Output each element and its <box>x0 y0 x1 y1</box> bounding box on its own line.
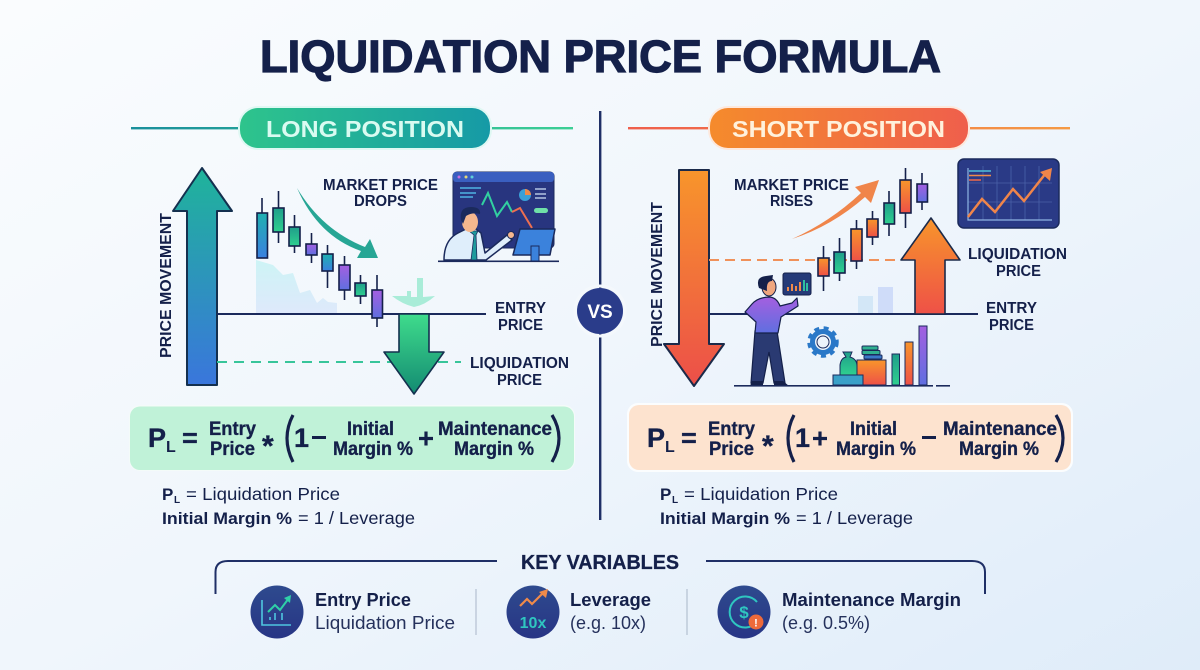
label: market price rises: RISES <box>770 193 813 210</box>
formula notes: short: L <box>672 495 678 506</box>
formula notes: long: = Liquidation Price <box>186 484 340 504</box>
label: market price rises <box>734 177 849 210</box>
label: entry price: PRICE <box>989 317 1034 334</box>
item: maintenance margin: Maintenance Margin <box>782 590 961 610</box>
formula: long: 1 <box>294 423 309 453</box>
label: entry price: ENTRY <box>495 300 547 317</box>
faded bars <box>858 287 893 314</box>
heading: long position pill: LONG POSITION <box>266 116 464 142</box>
arrow: price movement up <box>173 168 232 385</box>
label: entry price: ENTRY <box>986 300 1038 317</box>
item: leverage <box>506 586 651 638</box>
label: liquidation price: PRICE <box>996 263 1041 280</box>
item: entry price: Liquidation Price <box>315 613 455 633</box>
panel: short position <box>627 106 1073 528</box>
label: price movement: PRICE MOVEMENT <box>158 213 175 358</box>
label: price movement: PRICE MOVEMENT <box>649 202 666 347</box>
center divider with VS badge <box>575 111 625 520</box>
formula notes: long: = 1 / Leverage <box>298 508 415 528</box>
arrow: market price rise <box>792 180 879 239</box>
heading: short position pill: SHORT POSITION <box>732 116 945 142</box>
formula: short: Entry <box>708 419 755 440</box>
label: entry price <box>986 300 1038 334</box>
formula: long: P <box>148 423 166 453</box>
label: entry price: PRICE <box>498 317 543 334</box>
arrow: price movement down <box>664 170 724 386</box>
arrow: green down to liquidation <box>384 314 444 394</box>
formula: long: * <box>262 430 274 463</box>
liquidation dashed line <box>709 259 895 261</box>
formula notes: long: P <box>162 485 173 504</box>
formula: short: Maintenance <box>943 419 1057 440</box>
item: maintenance margin: ! <box>754 618 758 630</box>
bracket <box>216 561 985 594</box>
formula: long: L <box>166 439 176 456</box>
formula: short: Initial <box>850 419 897 440</box>
formula: long: Maintenance <box>438 419 552 440</box>
icon: gear <box>809 328 837 356</box>
faded down arrow icon <box>392 278 435 307</box>
formula: short: Margin % <box>959 439 1039 460</box>
title: LIQUIDATION PRICE FORMULA <box>260 31 941 82</box>
label: market price rises: MARKET PRICE <box>734 177 849 194</box>
formula notes: long: Initial Margin % <box>162 509 292 528</box>
panel: key variables <box>216 552 985 638</box>
formula: short: Price <box>709 439 754 460</box>
divider <box>686 589 688 635</box>
chart card: rising trend <box>958 159 1059 228</box>
item: leverage: 10x <box>520 615 546 632</box>
formula notes: long <box>162 484 415 528</box>
formula notes: short <box>660 484 913 528</box>
formula: long: = <box>182 423 198 453</box>
formula: short: * <box>762 430 774 463</box>
item: maintenance margin: (e.g. 0.5%) <box>782 613 870 633</box>
label: liquidation price: PRICE <box>497 372 542 389</box>
label: liquidation price <box>470 355 569 389</box>
label: liquidation price: LIQUIDATION <box>968 246 1067 263</box>
center divider with VS badge: VS <box>587 302 613 323</box>
label: market price drops <box>323 177 438 210</box>
item: maintenance margin <box>718 586 961 638</box>
formula notes: short: P <box>660 485 671 504</box>
item: leverage: (e.g. 10x) <box>570 613 646 633</box>
formula: short: P <box>647 423 665 453</box>
formula notes: short: = Liquidation Price <box>684 484 838 504</box>
heading: long position pill <box>131 106 573 150</box>
formula: short: = <box>681 423 697 453</box>
candlestick chart <box>257 191 382 327</box>
formula: short: 1 <box>795 423 810 453</box>
label: market price drops: DROPS <box>354 193 407 210</box>
label: liquidation price: LIQUIDATION <box>470 355 569 372</box>
icon: trader with tablet <box>745 273 811 386</box>
candlestick chart <box>818 168 928 291</box>
formula: long <box>129 405 575 471</box>
formula: short <box>627 403 1073 472</box>
panel: long position <box>129 106 575 528</box>
entry price line <box>217 313 486 315</box>
faded area chart <box>256 260 337 314</box>
formula: long: Margin % <box>454 439 534 460</box>
entry price line <box>709 313 978 315</box>
icon: money and bar chart <box>833 326 927 385</box>
label: entry price <box>495 300 547 334</box>
item: entry price: Entry Price <box>315 590 411 610</box>
formula: long: Margin % <box>333 439 413 460</box>
item: maintenance margin: $ <box>739 603 749 622</box>
liquidation dashed line <box>217 361 461 363</box>
formula notes: long: L <box>174 495 180 506</box>
formula: short: L <box>665 439 675 456</box>
divider <box>476 589 477 635</box>
item: leverage: Leverage <box>570 590 651 610</box>
formula: long: Initial <box>347 419 394 440</box>
item: entry price <box>250 586 455 638</box>
ground line <box>734 385 950 387</box>
heading: key variables: KEY VARIABLES <box>521 552 679 574</box>
formula: short: Margin % <box>836 439 916 460</box>
formula notes: short: = 1 / Leverage <box>796 508 913 528</box>
icon: analyst at monitor <box>438 172 559 262</box>
formula notes: short: Initial Margin % <box>660 509 790 528</box>
label: market price drops: MARKET PRICE <box>323 177 438 194</box>
formula: long: Price <box>210 439 255 460</box>
heading: short position pill <box>628 106 1070 150</box>
arrow: market price drop <box>297 188 378 258</box>
formula: long: Entry <box>209 419 256 440</box>
label: liquidation price <box>968 246 1067 280</box>
arrow: orange up to liquidation <box>901 218 960 314</box>
